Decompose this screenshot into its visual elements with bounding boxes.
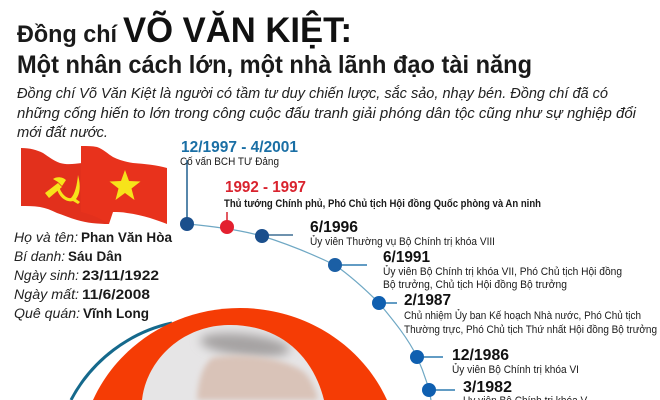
- entry: 2/1987: [404, 292, 657, 336]
- entry: 6/1996: 6/1996: [310, 219, 358, 236]
- entry: 6/1991: Ủy viên Bộ Chính trị khóa VII, Phó Chủ tịch Hội đồng: [383, 265, 622, 278]
- timeline nodes: [180, 217, 194, 231]
- personal details: Sáu Dân: [68, 248, 122, 264]
- flag: left red field: [21, 148, 109, 224]
- entry: 2/1987: Chủ nhiệm Ủy ban Kế hoạch Nhà nước, Phó Chủ tịch: [404, 309, 641, 322]
- entry: 1992 - 1997: Thủ tướng Chính phủ, Phó Chủ tịch Hội đồng Quốc phòng và An ninh: [224, 198, 541, 210]
- timeline curve: [187, 224, 431, 400]
- portrait circle: [93, 308, 387, 400]
- icon: party and national flags: [21, 146, 167, 224]
- portrait: white hair: [142, 325, 324, 400]
- personal details: Quê quán:: [14, 305, 80, 321]
- title: Đồng chí: [17, 21, 118, 48]
- personal details: Họ và tên:: [14, 229, 78, 245]
- timeline: [180, 160, 455, 400]
- connectors: [187, 160, 455, 390]
- personal details: Ngày mất:: [14, 286, 79, 302]
- personal details: Ngày sinh:: [14, 267, 79, 283]
- portrait: face: [197, 356, 318, 400]
- entry: 12/1997 - 4/2001: Cố vấn BCH TƯ Đảng: [180, 156, 279, 168]
- personal details: [14, 229, 172, 321]
- personal details: Phan Văn Hòa: [81, 229, 172, 245]
- intro paragraph: [17, 85, 637, 141]
- entry: 12/1986: 12/1986: [452, 347, 509, 364]
- title: [17, 10, 352, 50]
- entry: 3/1982: 3/1982: [463, 379, 512, 396]
- intro paragraph: Đồng chí Võ Văn Kiệt là người có tầm tư duy chiến lược, sắc sảo, nhạy bén. Đồng chí đã có: [17, 85, 608, 102]
- intro paragraph: những cống hiến to lớn trong công cuộc đấu tranh giải phóng dân tộc cũng như sự nghiệp đổi: [17, 105, 637, 122]
- personal details: 11/6/2008: [82, 286, 150, 302]
- entry: 6/1996: Ủy viên Thường vụ Bộ Chính trị khóa VIII: [310, 235, 495, 248]
- entry: 6/1991: [383, 249, 622, 291]
- subtitle: Một nhân cách lớn, một nhà lãnh đạo tài năng: [17, 51, 532, 79]
- portrait: grey hair shading: [199, 329, 291, 361]
- personal details: Vĩnh Long: [83, 305, 149, 321]
- entry: 12/1986: [452, 347, 579, 376]
- title: VÕ VĂN KIỆT:: [123, 10, 352, 50]
- flag: right red field: [81, 146, 167, 224]
- entry: 12/1997 - 4/2001: [180, 139, 298, 168]
- entry: 1992 - 1997: [224, 179, 541, 210]
- icon: hammer and sickle: [45, 175, 80, 204]
- teal arc behind portrait: [71, 323, 172, 400]
- personal details: 23/11/1922: [82, 267, 159, 283]
- portrait: head: [142, 325, 324, 400]
- icon: star: [110, 170, 140, 200]
- personal details: Bí danh:: [14, 248, 65, 264]
- entry: 6/1996: [310, 219, 495, 248]
- entry: 6/1991: Bộ trưởng, Chủ tịch Hội đồng Bộ trưởng: [383, 279, 567, 291]
- entry: 12/1997 - 4/2001: 12/1997 - 4/2001: [181, 139, 298, 156]
- entry: 6/1991: 6/1991: [383, 249, 430, 266]
- entry: 12/1986: Ủy viên Bộ Chính trị khóa VI: [452, 363, 579, 376]
- entry: 2/1987: 2/1987: [404, 292, 451, 309]
- intro paragraph: mới đất nước.: [17, 124, 108, 141]
- entry: 1992 - 1997: 1992 - 1997: [225, 179, 306, 196]
